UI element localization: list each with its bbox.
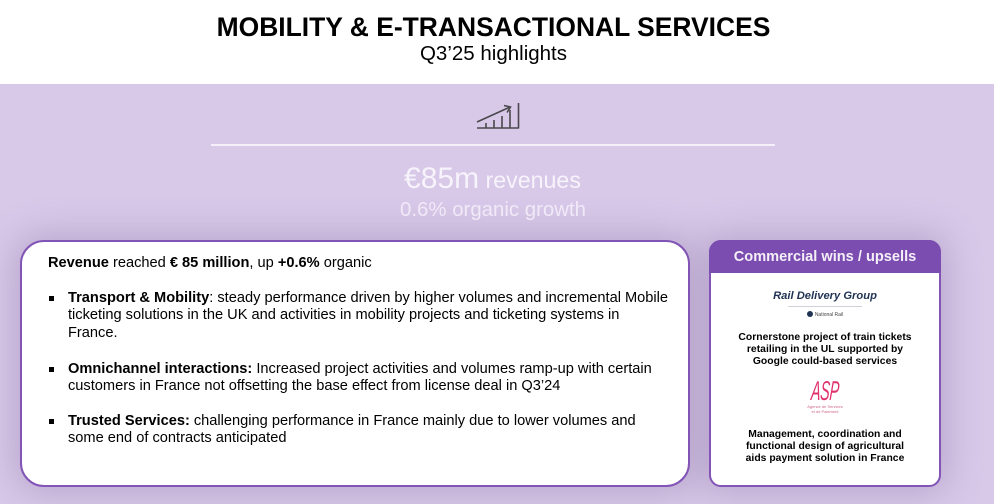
subtitle: Q3’25 highlights [420,42,567,65]
bullet: omnichannel interactions: Omnichannel interactions: Increased project activities and volumes ramp-up with certain [68,361,652,377]
text: ASP win: Management, coordination and [748,429,902,440]
bullet: trusted services: Trusted Services: challenging performance in France mainly due to lower volumes and [68,413,636,429]
panel: commercial wins [709,240,941,487]
panel: revenue commentary [20,240,690,487]
text: rail win: retailing in the UL supported by [747,344,903,355]
headline revenue figure: €85m revenues [404,162,581,195]
bullet: transport and mobility [49,290,668,341]
text: ASP win [746,429,904,464]
text: ASP win: functional design of agricultural [746,441,904,452]
text: rail win [738,332,912,367]
commercial wins header: Commercial wins / upsells [734,249,916,265]
bullet: transport and mobility: ticketing solutions in the UK and activities in mobility projects and ticketing systems in [68,307,619,323]
commercial wins header [709,240,941,273]
revenue summary line: Revenue reached € 85 million, up +0.6% organic [48,255,372,271]
title: MOBILITY & E-TRANSACTIONAL SERVICES [217,12,770,42]
logo: Rail Delivery Group: Rail Delivery Group [773,290,877,302]
bullet: trusted services [49,413,636,446]
bullet: trusted services: some end of contracts anticipated [68,430,286,446]
logo: Rail Delivery Group: National Rail [815,312,843,318]
logo: ASP: ASP [810,377,840,406]
logo: Rail Delivery Group [773,290,877,318]
logo: ASP: Agence de Services [807,404,843,409]
logo: ASP: et de Paiement [812,409,838,414]
bullet: omnichannel interactions [49,361,652,394]
text: rail win: Cornerstone project of train tickets [738,332,912,343]
text: rail win: Google could-based services [753,356,897,367]
organic growth text: 0.6% organic growth [400,199,586,221]
logo: ASP [807,377,843,414]
icon: rising bar chart [476,103,520,129]
bullet: omnichannel interactions: customers in France not offsetting the base effect from license deal in Q3’24 [68,378,560,394]
bullet: transport and mobility: France. [68,325,118,341]
bullet: transport and mobility: Transport & Mobility: steady performance driven by higher volumes and incremental Mobile [68,290,668,306]
divider line [211,144,775,146]
text: ASP win: aids payment solution in France [746,453,904,464]
